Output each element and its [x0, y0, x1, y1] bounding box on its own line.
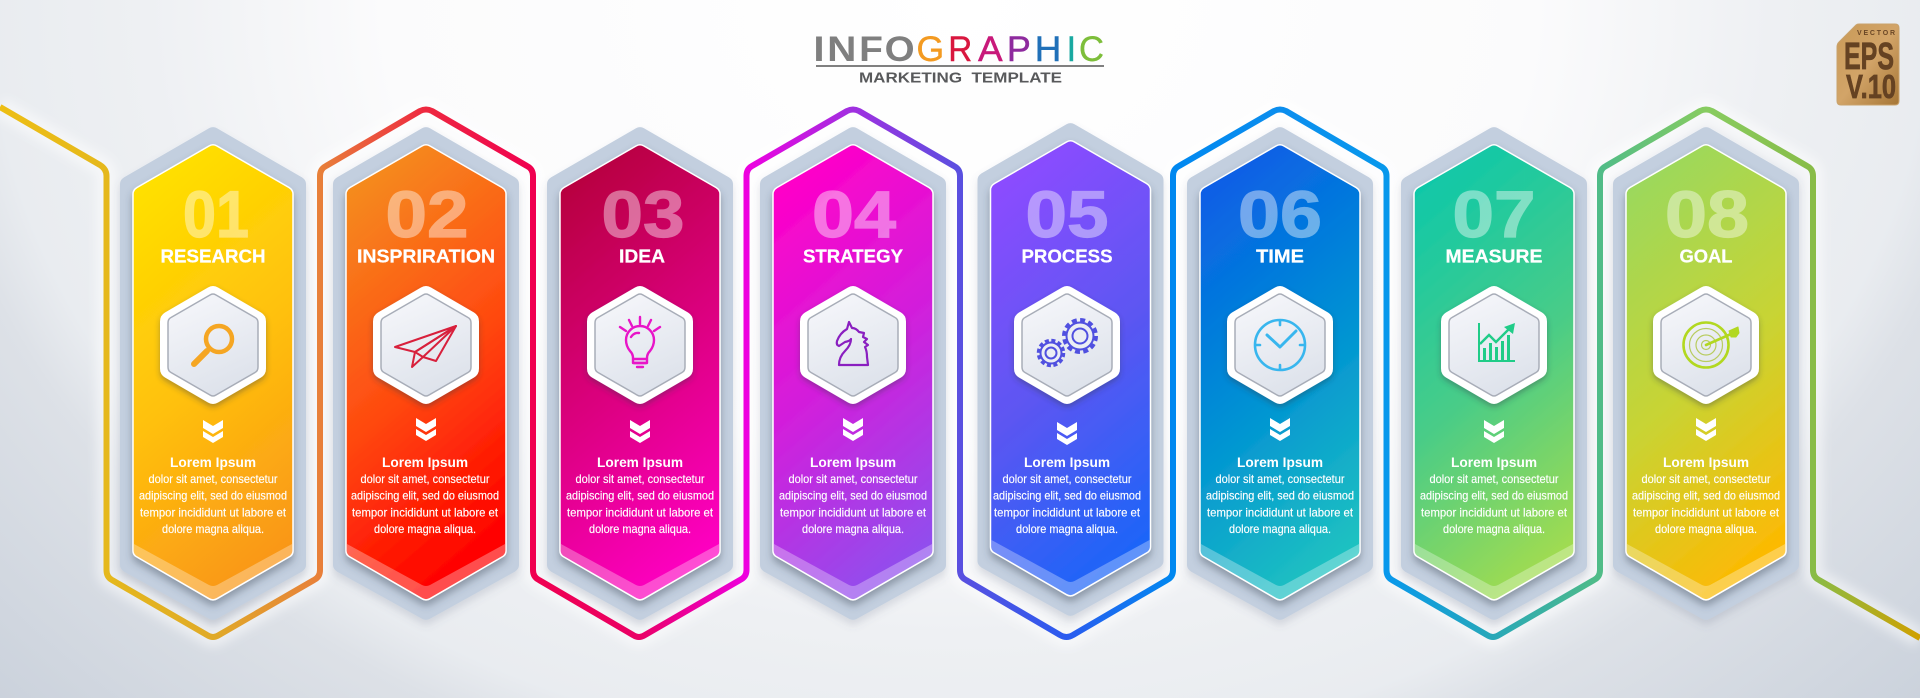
serpentine connector line	[0, 107, 1920, 638]
text block	[1420, 454, 1568, 536]
badge: EPS v.10: EPS	[1844, 36, 1894, 78]
title time: TIME	[1256, 246, 1304, 266]
heading: INFOGRAPHIC: N	[827, 30, 856, 69]
text block: tempor incididunt ut labore et	[1633, 505, 1780, 519]
heading: INFOGRAPHIC: R	[948, 30, 972, 69]
text block: tempor incididunt ut labore et	[780, 505, 927, 519]
icon: target with arrow	[1684, 322, 1739, 368]
number 05: 05	[1026, 177, 1108, 251]
panel: 06 time	[1187, 127, 1373, 620]
text block	[351, 454, 499, 536]
heading: INFOGRAPHIC: I	[1066, 30, 1076, 69]
heading: INFOGRAPHIC: C	[1079, 30, 1104, 69]
text block: dolor sit amet, consectetur	[1216, 472, 1344, 486]
text block: adipiscing elit, sed do eiusmod	[566, 488, 714, 502]
panel: 08 goal	[1613, 127, 1799, 620]
text block: adipiscing elit, sed do eiusmod	[1632, 488, 1780, 502]
text block	[1206, 454, 1354, 536]
number 08: 08	[1665, 177, 1749, 251]
text block: tempor incididunt ut labore et	[352, 505, 499, 519]
icon: clock	[1255, 320, 1305, 370]
text block: Lorem Ipsum	[1663, 454, 1749, 470]
icon: paper plane	[395, 326, 456, 367]
panel: 04 strategy	[760, 127, 946, 620]
number 02: 02	[386, 177, 468, 251]
icon: magnifier	[194, 326, 232, 364]
heading: INFOGRAPHIC: F	[859, 30, 883, 69]
text block: Lorem Ipsum	[810, 454, 896, 470]
text block: Lorem Ipsum	[170, 454, 256, 470]
text block: adipiscing elit, sed do eiusmod	[1420, 488, 1568, 502]
title: infographic marketing template	[813, 30, 1104, 86]
text block: dolore magna aliqua.	[589, 522, 691, 536]
text block: dolore magna aliqua.	[374, 522, 476, 536]
text block: dolor sit amet, consectetur	[1430, 472, 1558, 486]
panel: 05 process	[978, 123, 1164, 616]
title idea: IDEA	[619, 246, 665, 266]
text block: Lorem Ipsum	[597, 454, 683, 470]
text block: adipiscing elit, sed do eiusmod	[351, 488, 499, 502]
text block: tempor incididunt ut labore et	[1207, 505, 1354, 519]
panel: 02 inspriration	[333, 127, 519, 620]
text block: tempor incididunt ut labore et	[140, 505, 287, 519]
heading: INFOGRAPHIC: P	[1007, 30, 1031, 69]
text block: dolor sit amet, consectetur	[360, 472, 490, 486]
text block: adipiscing elit, sed do eiusmod	[993, 488, 1141, 502]
panel: 07 measure	[1401, 127, 1587, 620]
panel: 01 research	[120, 127, 306, 620]
text block: tempor incididunt ut labore et	[567, 505, 714, 519]
text block: dolor sit amet, consectetur	[576, 472, 704, 486]
text block: adipiscing elit, sed do eiusmod	[1206, 488, 1354, 502]
number 03: 03	[602, 177, 684, 251]
heading: INFOGRAPHIC	[813, 30, 1104, 69]
icon: gears	[1038, 320, 1096, 366]
text block: tempor incididunt ut labore et	[994, 505, 1141, 519]
number 06: 06	[1238, 177, 1322, 251]
title goal: GOAL	[1680, 246, 1732, 266]
heading: INFOGRAPHIC: A	[978, 30, 1003, 69]
text block: dolor sit amet, consectetur	[788, 472, 918, 486]
title strategy: STRATEGY	[803, 246, 904, 266]
icon: growth chart	[1479, 323, 1515, 361]
text block	[1632, 454, 1780, 536]
text block: tempor incididunt ut labore et	[1421, 505, 1568, 519]
heading: INFOGRAPHIC: O	[885, 30, 915, 69]
panel: 03 idea	[547, 127, 733, 620]
number 07: 07	[1453, 177, 1535, 251]
icon: chess knight	[837, 322, 868, 365]
text block: adipiscing elit, sed do eiusmod	[139, 488, 287, 502]
number 01: 01	[183, 177, 249, 251]
text block	[139, 454, 287, 536]
title measure: MEASURE	[1446, 246, 1542, 266]
title process: PROCESS	[1021, 246, 1113, 266]
title research: RESEARCH	[160, 246, 266, 266]
badge: EPS v.10: VECTOR	[1857, 30, 1895, 37]
badge: EPS v.10	[1837, 24, 1899, 105]
text block	[779, 454, 927, 536]
text block	[993, 454, 1141, 536]
heading: INFOGRAPHIC: H	[1035, 30, 1061, 69]
subheading: marketing template: MARKETING TEMPLATE	[859, 70, 1062, 86]
text block: Lorem Ipsum	[1237, 454, 1323, 470]
icon: light bulb	[620, 317, 660, 367]
badge: EPS v.10: V.10	[1846, 68, 1896, 105]
text block: adipiscing elit, sed do eiusmod	[779, 488, 927, 502]
text block: dolor sit amet, consectetur	[148, 472, 278, 486]
text block: dolore magna aliqua.	[1655, 522, 1757, 536]
text block: dolore magna aliqua.	[802, 522, 904, 536]
text block: dolore magna aliqua.	[1229, 522, 1331, 536]
text block	[566, 454, 714, 536]
text block: dolore magna aliqua.	[1016, 522, 1118, 536]
number 04: 04	[812, 177, 896, 251]
text block: Lorem Ipsum	[1024, 454, 1110, 470]
title inspriration: INSPRIRATION	[357, 246, 495, 266]
heading: INFOGRAPHIC: G	[916, 30, 944, 69]
text block: dolor sit amet, consectetur	[1002, 472, 1132, 486]
text block: dolore magna aliqua.	[162, 522, 264, 536]
text block: dolore magna aliqua.	[1443, 522, 1545, 536]
heading: INFOGRAPHIC: I	[813, 30, 825, 69]
text block: dolor sit amet, consectetur	[1642, 472, 1770, 486]
text block: Lorem Ipsum	[382, 454, 468, 470]
text block: Lorem Ipsum	[1451, 454, 1537, 470]
